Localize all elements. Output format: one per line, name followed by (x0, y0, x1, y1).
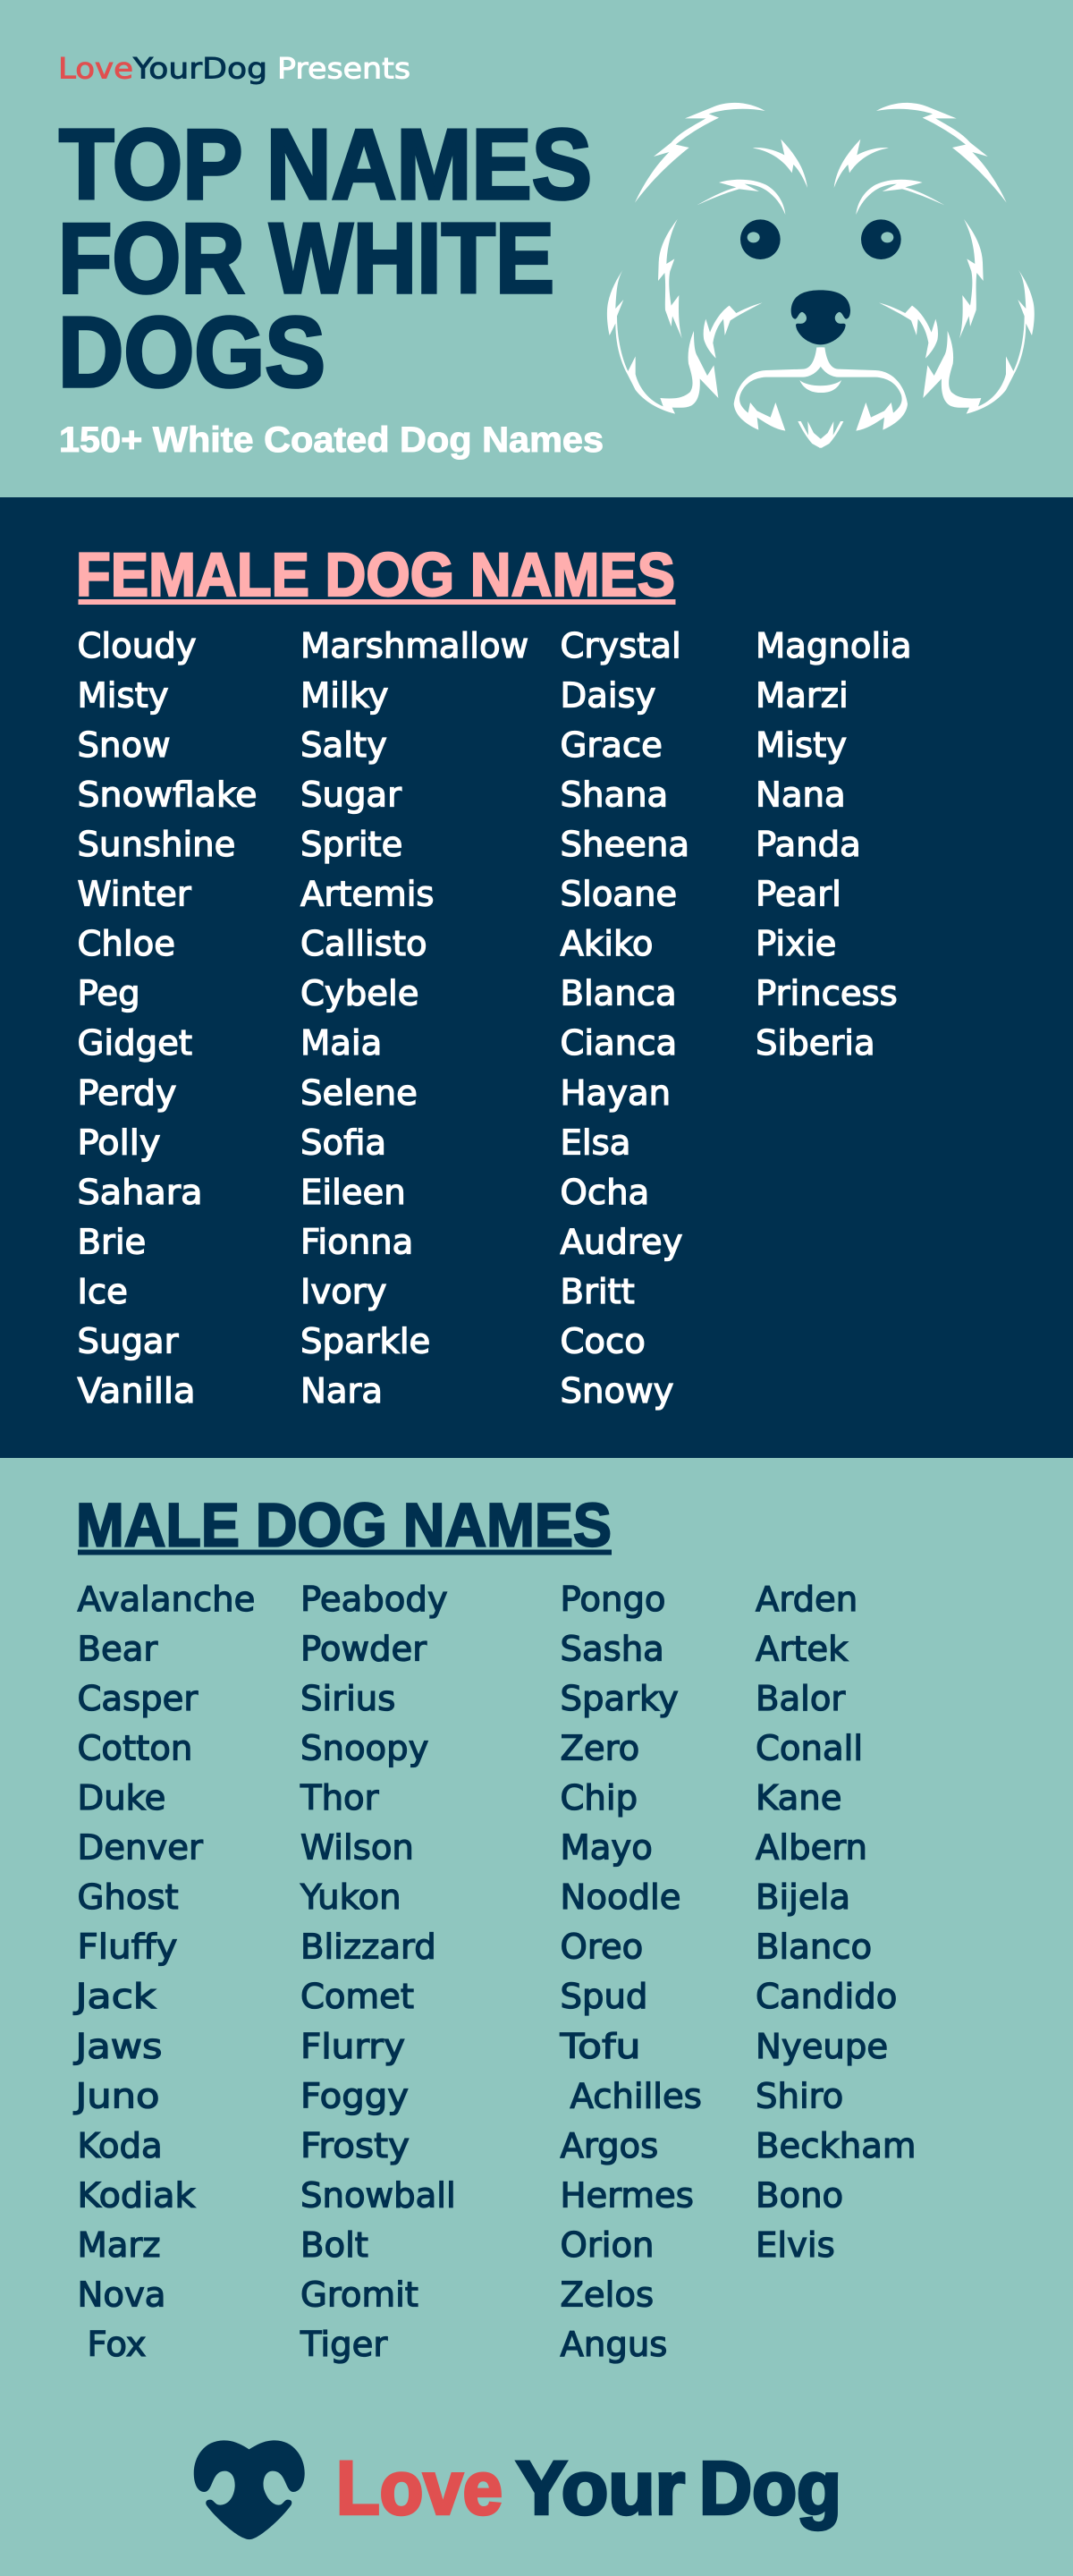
male names column 2: Tiger (300, 2325, 387, 2365)
male names column 1: Fluffy (77, 1928, 177, 1968)
male names column 3: Orion (560, 2225, 655, 2266)
male names column 2: Frosty (300, 2126, 410, 2166)
male names column 4: Conall (756, 1729, 863, 1769)
male names column 3: Argos (560, 2126, 658, 2166)
female names column 1: Cloudy (77, 626, 197, 666)
male names column 4: Nyeupe (756, 2027, 888, 2067)
female names column 2: Sparkle (300, 1321, 430, 1361)
female names column 4: Princess (756, 974, 898, 1014)
male names column 2: Bolt (300, 2225, 368, 2266)
female names column 1: Ice (77, 1272, 128, 1312)
male names column 2: Powder (300, 1630, 427, 1669)
male names column 2: Gromit (300, 2275, 418, 2315)
male names column 4: Shiro (756, 2076, 843, 2116)
female names column 4: Pearl (756, 875, 841, 915)
female names column 3: Crystal (560, 626, 681, 666)
female names column 2: Cybele (300, 974, 418, 1014)
female names column 3: Coco (560, 1321, 646, 1361)
icon: white dog face (607, 103, 1035, 448)
title: FOR WHITE (58, 203, 554, 314)
female names column 2: Sugar (300, 775, 401, 816)
female names column 2: Callisto (300, 924, 427, 964)
male names column 3: Spud (560, 1977, 647, 2017)
logo wordmark: Your (516, 2445, 685, 2529)
male names column 3: Mayo (560, 1828, 653, 1868)
male names column 3: Sparky (560, 1679, 679, 1719)
female names column 3: Cianca (560, 1023, 677, 1063)
female names column 3: Grace (560, 725, 663, 766)
male names column 3: Tofu (559, 2027, 640, 2067)
female names column 3: Elsa (560, 1123, 630, 1163)
female names column 2 (300, 626, 528, 1411)
male names column 2 (300, 1580, 456, 2365)
male names column 2: Comet (300, 1977, 414, 2017)
female names column 1: Perdy (77, 1073, 177, 1114)
male names column 1: Denver (77, 1828, 203, 1868)
male names column 1: Ghost (77, 1877, 179, 1918)
male names column 4: Blanco (756, 1928, 872, 1968)
subtitle: 150+ White Coated Dog Names (59, 420, 604, 460)
female names column 2: Ivory (300, 1272, 387, 1312)
female names column 1: Peg (77, 974, 140, 1014)
female names column 2: Salty (300, 725, 387, 766)
female names column 1: Sunshine (77, 825, 235, 865)
panel: female dog names (0, 497, 1073, 1458)
female names column 4: Nana (756, 775, 846, 816)
female names column 4: Magnolia (756, 626, 912, 666)
female names column 2: Nara (300, 1371, 383, 1411)
male names column 2: Foggy (300, 2076, 409, 2116)
title: DOGS (58, 297, 325, 408)
male names column 4: Kane (756, 1778, 841, 1818)
male names column 1 (73, 1580, 255, 2365)
female names column 1: Snowflake (77, 775, 258, 816)
female names column 4: Pixie (756, 924, 836, 964)
female names column 3: Hayan (560, 1073, 671, 1114)
male names column 4: Elvis (756, 2225, 835, 2266)
female names column 3: Blanca (560, 974, 677, 1014)
female names column 3: Snowy (560, 1371, 673, 1411)
male names column 1: Kodiak (77, 2175, 196, 2216)
male names column 4: Bono (756, 2175, 843, 2216)
male names column 1: Casper (77, 1679, 198, 1719)
icon: dog head heart (194, 2440, 305, 2539)
male names column 2: Sirius (300, 1679, 395, 1719)
male names column 4: Beckham (756, 2126, 916, 2166)
logo wordmark (336, 2445, 841, 2529)
presents line: YourDog (132, 52, 267, 86)
female names column 2: Artemis (300, 875, 435, 915)
presents line: Love (58, 52, 133, 86)
heading: male dog names: MALE DOG NAMES (76, 1490, 612, 1560)
female names column 1 (77, 626, 258, 1411)
female names column 3: Sloane (560, 875, 677, 915)
footer logo (194, 2440, 841, 2539)
male names column 1: Jack (73, 1977, 156, 2017)
male names column 3 (559, 1580, 702, 2365)
presents line (58, 52, 410, 86)
male names column 3: Sasha (560, 1630, 664, 1669)
female names column 1: Chloe (77, 924, 175, 964)
male names column 2: Snoopy (300, 1729, 428, 1769)
female names column 1: Gidget (77, 1023, 192, 1063)
male names column 4: Balor (756, 1679, 845, 1719)
female names column 1: Snow (77, 725, 171, 766)
male names column 4 (756, 1580, 916, 2266)
female names column 3: Audrey (560, 1222, 682, 1262)
male names column 2: Snowball (300, 2175, 456, 2216)
male names column 1: Nova (77, 2275, 165, 2315)
presents line: Presents (277, 52, 410, 86)
male names column 1: Koda (77, 2126, 163, 2166)
male names column 3: Pongo (560, 1580, 666, 1620)
male names column 1: Marz (77, 2225, 161, 2266)
female names column 2: Sofia (300, 1123, 386, 1163)
female names column 3: Sheena (560, 825, 689, 865)
male names column 2: Peabody (300, 1580, 448, 1620)
logo wordmark: Love (336, 2445, 503, 2529)
female names column 3: Akiko (560, 924, 654, 964)
male names column 3: Noodle (560, 1877, 681, 1918)
female names column 2: Fionna (300, 1222, 413, 1262)
male names column 1: Duke (77, 1778, 165, 1818)
heading: female dog names: FEMALE DOG NAMES (76, 540, 675, 609)
panel: male dog names (73, 1490, 916, 2365)
female names column 4: Misty (756, 725, 847, 766)
male names column 1: Cotton (77, 1729, 192, 1769)
female names column 2: Maia (300, 1023, 382, 1063)
logo wordmark: Dog (699, 2445, 841, 2529)
female names column 3: Daisy (560, 676, 656, 716)
female names column 1: Winter (77, 875, 191, 915)
male names column 4: Bijela (756, 1877, 850, 1918)
male names column 4: Candido (756, 1977, 897, 2017)
male names column 3: Chip (560, 1778, 638, 1818)
female names column 1: Misty (77, 676, 169, 716)
female names column 1: Sugar (77, 1321, 179, 1361)
male names column 1: Avalanche (77, 1580, 255, 1620)
male names column 1: Juno (73, 2076, 159, 2116)
female names column 4: Panda (756, 825, 861, 865)
male names column 4: Albern (756, 1828, 867, 1868)
female names column 4 (756, 626, 912, 1063)
female names column 1: Sahara (77, 1173, 202, 1213)
female names column 4: Siberia (756, 1023, 875, 1063)
female names column 1: Brie (77, 1222, 146, 1262)
female names column 2: Selene (300, 1073, 418, 1114)
title: TOP NAMES (59, 109, 592, 220)
male names column 2: Blizzard (300, 1928, 436, 1968)
header (58, 52, 1035, 460)
male names column 4: Arden (756, 1580, 858, 1620)
female names column 3 (560, 626, 689, 1411)
male names column 3: Achilles (570, 2076, 702, 2116)
male names column 1: Bear (77, 1630, 157, 1669)
female names column 1: Polly (77, 1123, 161, 1163)
male names column 2: Wilson (300, 1828, 414, 1868)
male names column 1: Jaws (73, 2027, 163, 2067)
female names column 2: Sprite (300, 825, 402, 865)
male names column 4: Artek (756, 1630, 849, 1669)
male names column 3: Zero (560, 1729, 639, 1769)
female names column 3: Shana (560, 775, 668, 816)
female names column 2: Milky (300, 676, 389, 716)
female names column 4: Marzi (756, 676, 849, 716)
male names column 2: Yukon (300, 1877, 401, 1918)
male names column 3: Angus (560, 2325, 667, 2365)
female names column 3: Ocha (560, 1173, 649, 1213)
male names column 2: Flurry (300, 2027, 405, 2067)
male names column 1: Fox (88, 2325, 147, 2365)
female names column 3: Britt (560, 1272, 635, 1312)
female names column 2: Eileen (300, 1173, 406, 1213)
male names column 3: Zelos (560, 2275, 654, 2315)
female names column 2: Marshmallow (300, 626, 528, 666)
title (58, 109, 592, 408)
male names column 3: Hermes (560, 2175, 694, 2216)
male names column 2: Thor (300, 1778, 379, 1818)
male names column 3: Oreo (560, 1928, 643, 1968)
female names column 1: Vanilla (77, 1371, 195, 1411)
